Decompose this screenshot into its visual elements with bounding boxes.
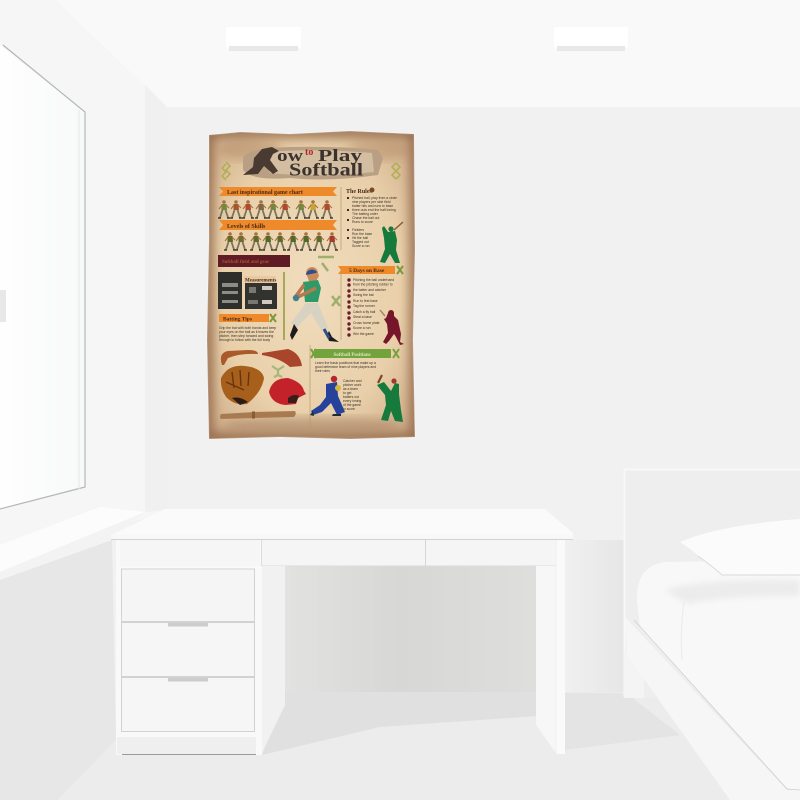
bullet list: Catch a fly ball <box>353 310 375 314</box>
top cabinet drawer strip <box>120 540 260 566</box>
icon: blue player <box>310 376 345 416</box>
section: the rules: batter hits and runs to base <box>352 204 393 208</box>
bullet list: Run to first base <box>353 299 378 303</box>
arms <box>296 285 316 297</box>
icon: red helmet <box>269 378 306 405</box>
divider lines <box>310 187 341 428</box>
icon: maroon batter <box>380 310 404 345</box>
title banner <box>243 146 383 180</box>
text block: positions details: Catcher and <box>343 379 362 383</box>
text block: positions intro: Learn the basic positions that make up a <box>315 361 376 365</box>
bullet list: Score a run <box>353 326 371 330</box>
poster paper <box>207 131 415 439</box>
section: the rules: Runs to score <box>352 220 373 224</box>
desk <box>111 509 573 755</box>
icon: main batter <box>290 267 339 342</box>
text block: batting: through to follow with the full body <box>219 338 270 342</box>
bullet list: from the pitching rubber to <box>353 282 393 286</box>
bullet list: Win the game <box>353 332 374 336</box>
bullet list: the batter and catcher <box>353 288 387 292</box>
section: the rules: Score a run <box>352 244 370 248</box>
text block: positions details: every inning <box>343 399 361 403</box>
row of fielders 1 <box>218 200 333 218</box>
ornament: small green figure <box>272 366 284 377</box>
text block: batting <box>219 326 276 342</box>
left wall <box>0 0 167 560</box>
desk top <box>111 509 573 535</box>
wall shade near bed <box>565 540 625 693</box>
poster <box>207 131 415 439</box>
scoreboard 2 <box>245 283 277 309</box>
title banner: Softball <box>289 160 363 180</box>
drawer 3 <box>122 678 254 732</box>
bullet list: Steal a base <box>353 315 372 319</box>
section: the rules: Pitched ball, play from a circle <box>352 196 397 200</box>
ribbon: second heading: Levels of Skills <box>227 224 266 230</box>
bullet list: Tag the runner <box>353 304 376 308</box>
text block: positions intro: their roles <box>315 369 330 373</box>
ribbon: base heading: 5 Days on Base <box>349 268 385 274</box>
bed frame <box>624 650 644 698</box>
title banner: Play <box>318 146 363 165</box>
text block: positions details: pitcher work <box>343 383 362 387</box>
cabinet inner side <box>261 566 285 755</box>
section: the rules <box>346 188 397 248</box>
section: the rules: three outs end the half inning <box>352 208 396 212</box>
icon: wooden bat <box>220 411 296 419</box>
icon: baseball glove <box>221 366 264 405</box>
cabinet base <box>117 737 256 754</box>
headboard <box>624 469 800 697</box>
section: the rules: nine players per side field <box>352 200 391 204</box>
drawer 2 <box>122 622 254 676</box>
title text: ow <box>277 146 304 165</box>
icon: green fielder <box>377 375 403 422</box>
window sill <box>0 507 145 572</box>
glove <box>293 295 299 301</box>
green ribbon heading <box>311 349 399 358</box>
handle 3 <box>168 678 208 682</box>
window <box>0 12 100 545</box>
jersey <box>303 280 321 302</box>
floor shadow under desk <box>262 692 552 755</box>
text block: positions details: to get <box>343 391 352 395</box>
scoreboard 2 heading: Measurements <box>245 278 276 284</box>
bullet list: Swing the bat <box>353 293 374 297</box>
ornament: vertical green <box>283 272 285 340</box>
icon: red glove small <box>262 349 302 367</box>
green ribbon heading: Softball Positions <box>333 353 371 358</box>
ribbon: top heading: Last inspirational game chart <box>227 190 303 196</box>
ribbon: base heading <box>338 266 403 274</box>
ceiling light right <box>554 27 628 51</box>
title banner: to <box>305 147 313 158</box>
floor <box>58 692 800 800</box>
bullet list: Cross home plate <box>353 321 380 325</box>
text block: positions intro <box>315 361 376 373</box>
section: the rules: Chase the ball out <box>352 216 379 220</box>
text block: positions details: as a team <box>343 387 358 391</box>
text block: batting: your eyes on the ball as it leaves the <box>219 330 274 334</box>
scoreboard heading <box>218 255 290 267</box>
text block: positions details: of the game <box>343 403 361 407</box>
bed <box>624 469 800 800</box>
helmet and head <box>306 267 319 281</box>
text block: positions intro: good defensive team of nine players and <box>315 365 376 369</box>
ornament right <box>392 163 400 179</box>
section: the rules: The batting order <box>352 212 379 216</box>
icon: batter silhouette <box>243 147 279 175</box>
section: the rules: Run the base <box>352 232 372 236</box>
pants <box>291 303 328 331</box>
drawer strip <box>262 540 558 566</box>
text block: positions details <box>343 379 362 411</box>
drawer 1 <box>122 569 254 622</box>
text block: positions details: batters out <box>343 395 359 399</box>
section: the rules: Tagged out <box>352 240 369 244</box>
bullet list: Pitching the ball underhand <box>353 278 394 282</box>
ribbon: second heading <box>219 220 337 230</box>
scoreboard heading: Softball field and gear <box>222 260 270 265</box>
ceiling <box>55 0 800 107</box>
handle 2 <box>168 623 208 626</box>
ornament left <box>222 162 230 180</box>
ribbon: top heading <box>219 187 337 196</box>
mattress <box>637 560 800 792</box>
wall under desk <box>262 566 536 693</box>
shoes <box>290 324 298 340</box>
lower left wall <box>0 540 116 800</box>
ornament: green x <box>318 257 340 306</box>
section: the rules: The Rules <box>346 189 373 195</box>
bullet list <box>347 278 394 337</box>
section: the rules: Fielders <box>352 228 364 232</box>
right leg <box>536 566 556 753</box>
ribbon: batting heading <box>219 314 276 322</box>
ribbon: batting heading: Batting Tips <box>223 316 252 322</box>
text block: batting: Grip the bat with both hands and keep <box>219 326 276 330</box>
text block: batting: pitcher, then step forward and swing <box>219 334 273 338</box>
scoreboard 2 heading <box>244 276 276 284</box>
icon: brown glove left <box>221 350 258 365</box>
scoreboard 1 <box>218 272 242 309</box>
icon: green batter <box>380 222 403 263</box>
row of fielders 2 <box>224 232 338 250</box>
section: the rules: Hit the ball <box>352 236 368 240</box>
text block: positions details: to score <box>343 407 355 411</box>
cabinet <box>116 540 262 755</box>
pillow <box>680 519 800 575</box>
ceiling light left <box>226 27 301 51</box>
